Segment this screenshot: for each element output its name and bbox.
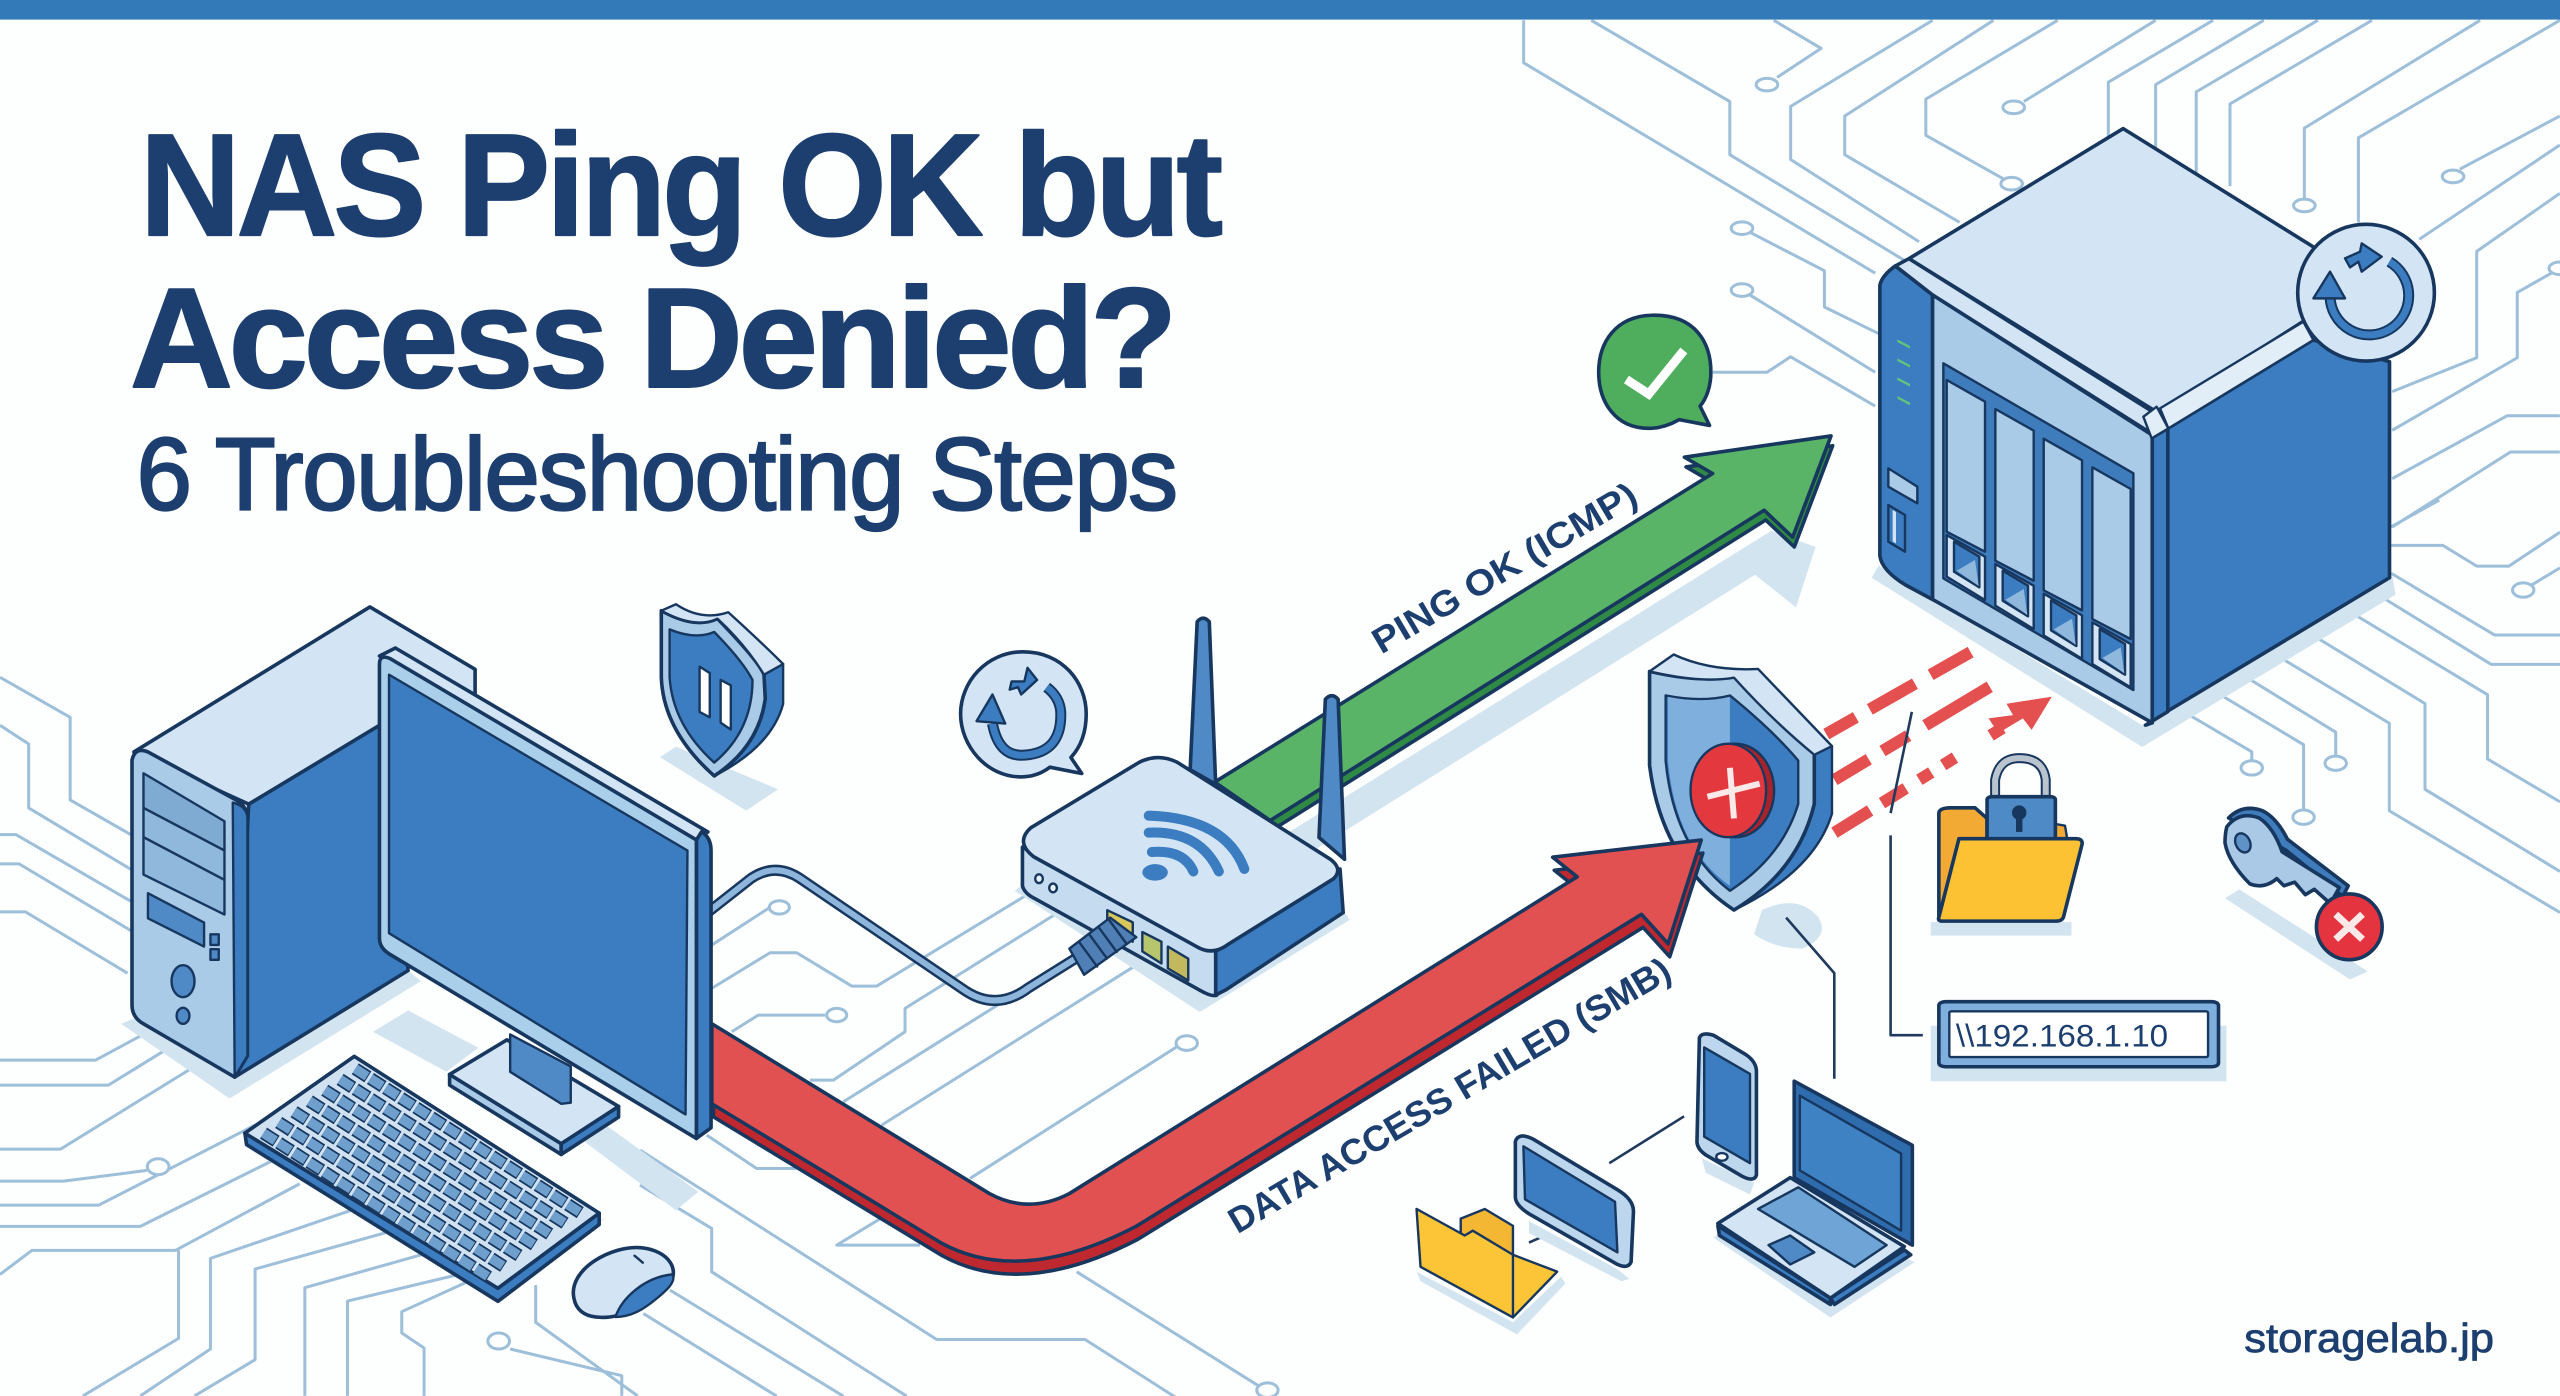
- circuit background: centre: [640, 877, 1278, 1396]
- NAS top rim: [2143, 322, 2313, 438]
- circuit background: lower left: [0, 677, 638, 1396]
- icon: yellow folder: [1417, 1209, 1565, 1334]
- antenna right: [1319, 696, 1344, 859]
- circuit background: top right: [1524, 20, 2560, 527]
- icon: locked folder: [1931, 758, 2082, 936]
- icon: key with red X: [2225, 808, 2382, 979]
- IP address box: [1931, 1002, 2227, 1081]
- thin connector lines: [1529, 712, 1923, 1243]
- monitor stand: [450, 1034, 619, 1154]
- title: NAS Ping OK but: [140, 103, 1222, 266]
- icon: smartphone landscape: [1515, 1136, 1633, 1281]
- mouse: [573, 1248, 673, 1317]
- icon: NAS sync badge: [2298, 224, 2434, 361]
- website credit: storagelab.jp: [2244, 1315, 2494, 1361]
- big firewall shield: [1650, 655, 1832, 949]
- status LEDs: [1897, 339, 1910, 405]
- router: [1015, 618, 1350, 1012]
- drive bay 3: [2044, 439, 2082, 659]
- icon: sync bubble near router: [961, 652, 1086, 777]
- monitor: [373, 648, 711, 1210]
- icon: small shield with pause bars: [660, 604, 783, 811]
- NAS device: [1872, 129, 2396, 747]
- icon: smartphone upright: [1697, 1034, 1756, 1195]
- red arrow: data access failed: [712, 840, 1703, 1274]
- icon: laptop: [1714, 1081, 1915, 1317]
- green arrow: ping OK: [1215, 436, 1833, 865]
- circuit background: bottom right: [2182, 500, 2560, 913]
- icon: green check bubble: [1599, 315, 1711, 428]
- drive bay 4: [2092, 467, 2131, 687]
- desktop tower: [121, 607, 475, 1098]
- antenna back: [1190, 618, 1216, 784]
- keyboard: [245, 1056, 607, 1303]
- title: Access Denied?: [130, 259, 1173, 418]
- label: ping ok: PING OK (ICMP): [1364, 474, 1644, 662]
- title: [130, 103, 1222, 418]
- label: data access failed: DATA ACCESS FAILED (SMB): [1221, 949, 1678, 1241]
- drive bay 1: [1947, 380, 1985, 600]
- top bar: [0, 0, 2560, 20]
- red dashed blocked links: [1826, 652, 2052, 833]
- network cable: [705, 870, 1136, 1000]
- drive bay 2: [1995, 409, 2034, 629]
- IP address box: \\192.168.1.10: [1956, 1019, 2168, 1054]
- subtitle: 6 Troubleshooting Steps: [136, 416, 1176, 531]
- NAS drive bays and front details: [1888, 339, 2133, 690]
